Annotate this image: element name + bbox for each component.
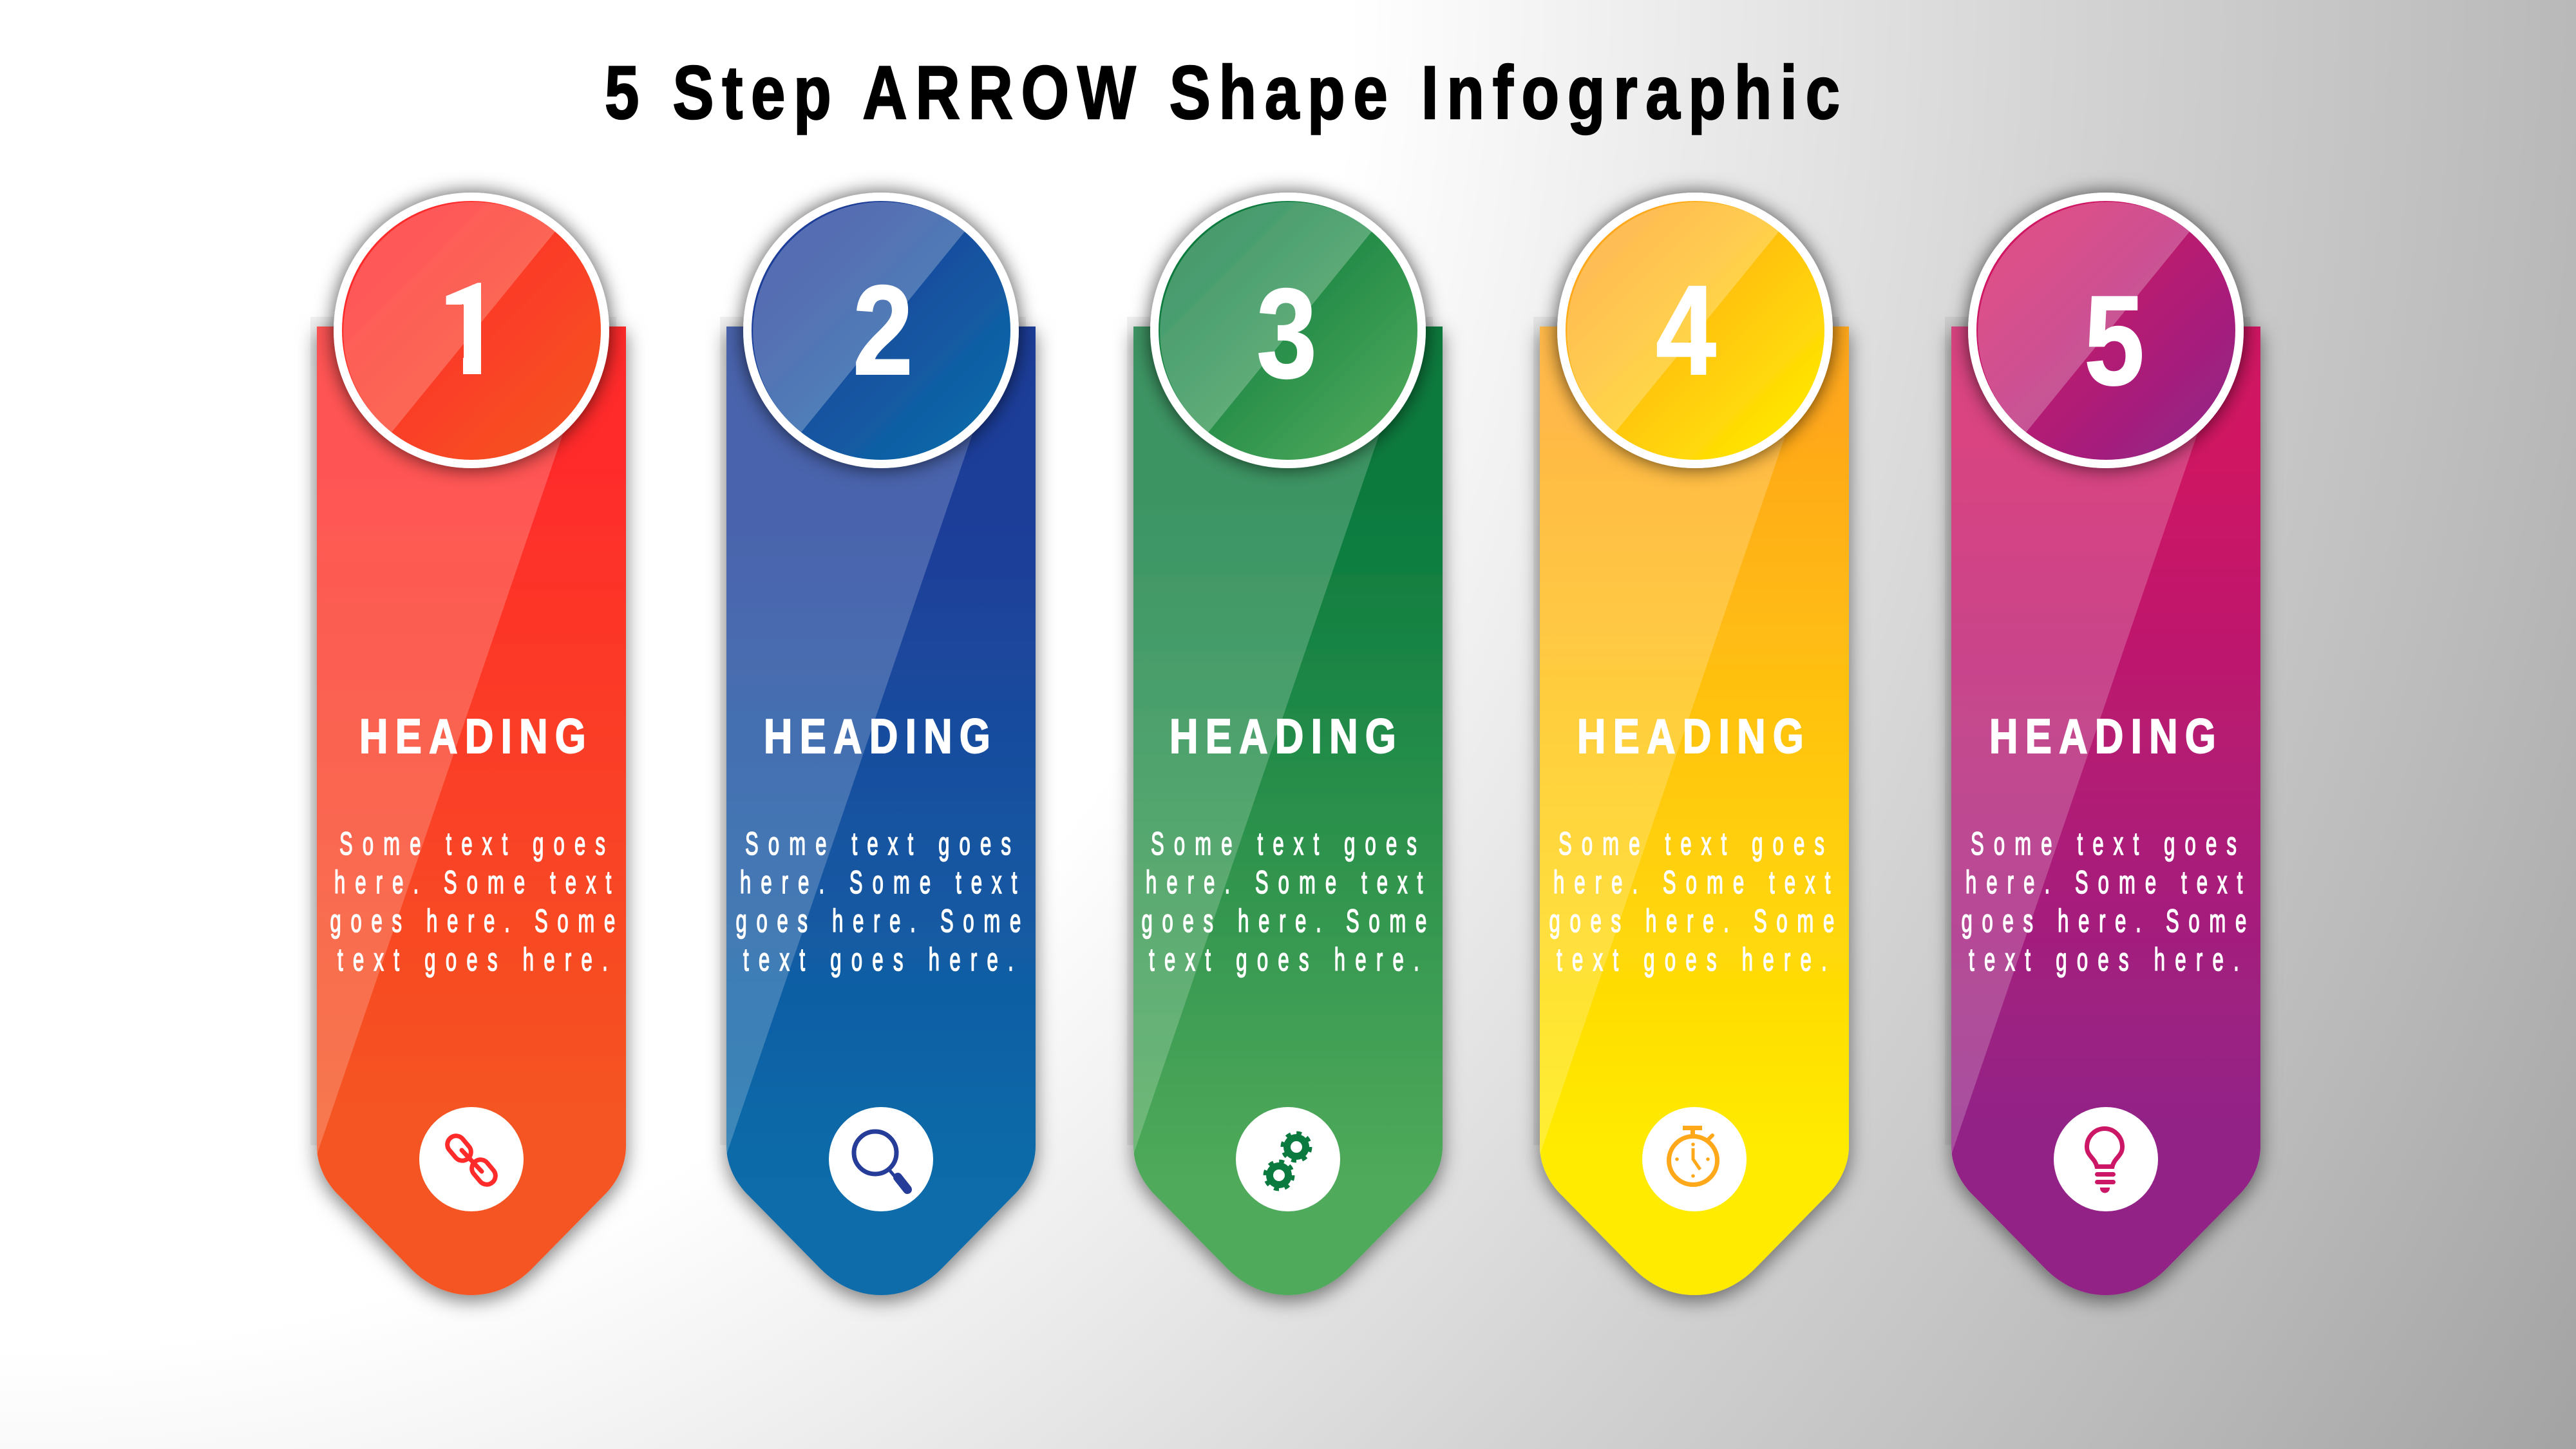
- body text: step 3: Some text goes: [1151, 825, 1417, 862]
- heading: step 4: HEADING: [1577, 709, 1804, 763]
- number badge: step 5: [1972, 197, 2240, 464]
- card shape: step 2: [720, 317, 1036, 1295]
- panel: step 5: [1945, 197, 2260, 1295]
- heading: step 3: HEADING: [1170, 709, 1396, 763]
- body text: step 5: [1962, 825, 2246, 978]
- body text: step 1: goes here. Some: [330, 902, 615, 939]
- number badge: step 4: [1561, 197, 1829, 464]
- body text: step 1: Some text goes: [339, 825, 605, 862]
- body text: step 1: text goes here.: [337, 941, 608, 978]
- heading: step 1: HEADING: [359, 709, 586, 763]
- heading: step 5: HEADING: [1989, 709, 2216, 763]
- card shape: step 5: [1945, 317, 2260, 1295]
- body text: step 3: goes here. Some: [1141, 902, 1426, 939]
- body text: step 4: Some text goes: [1558, 825, 1824, 862]
- body text: step 5: here. Some text: [1965, 864, 2243, 900]
- body text: step 2: goes here. Some: [735, 902, 1021, 939]
- icon: chain link: [419, 1107, 524, 1211]
- number: 4: 4: [1656, 259, 1716, 401]
- body text: step 2: here. Some text: [740, 864, 1018, 900]
- body text: step 1: here. Some text: [334, 864, 612, 900]
- number: 1: 1: [433, 230, 511, 411]
- body text: step 5: text goes here.: [1969, 941, 2239, 978]
- body text: step 5: Some text goes: [1971, 825, 2237, 862]
- number badge: step 1: [337, 197, 605, 464]
- body text: step 5: goes here. Some: [1962, 902, 2246, 939]
- icon: gears: [1236, 1107, 1340, 1211]
- body text: step 4: here. Some text: [1553, 864, 1831, 900]
- body text: step 2: text goes here.: [743, 941, 1014, 978]
- icon: stopwatch: [1642, 1107, 1747, 1211]
- panel: step 4: [1533, 197, 1849, 1295]
- panel: step 1: [310, 197, 626, 1295]
- card shape: step 4: [1533, 317, 1849, 1295]
- icon: magnifying glass: [829, 1107, 933, 1211]
- body text: step 3: [1141, 825, 1426, 978]
- body text: step 4: text goes here.: [1557, 941, 1827, 978]
- title: 5 Step ARROW Shape Infographic: [605, 50, 1840, 135]
- body text: step 4: [1549, 825, 1834, 978]
- body text: step 3: text goes here.: [1149, 941, 1419, 978]
- heading: step 2: HEADING: [764, 709, 990, 763]
- number badge: step 2: [747, 197, 1015, 464]
- body text: step 2: Some text goes: [745, 825, 1011, 862]
- number: 2: 2: [853, 259, 913, 401]
- body text: step 2: [735, 825, 1021, 978]
- panel: step 2: [720, 197, 1036, 1295]
- body text: step 4: goes here. Some: [1549, 902, 1834, 939]
- number: 3: 3: [1256, 262, 1317, 404]
- card shape: step 3: [1127, 317, 1443, 1295]
- number badge: step 3: [1154, 197, 1422, 464]
- number: 5: 5: [2084, 269, 2145, 412]
- body text: step 1: [330, 825, 615, 978]
- body text: step 3: here. Some text: [1146, 864, 1423, 900]
- panel: step 3: [1127, 197, 1443, 1295]
- card shape: step 1: [310, 317, 626, 1295]
- icon: light bulb: [2054, 1107, 2158, 1211]
